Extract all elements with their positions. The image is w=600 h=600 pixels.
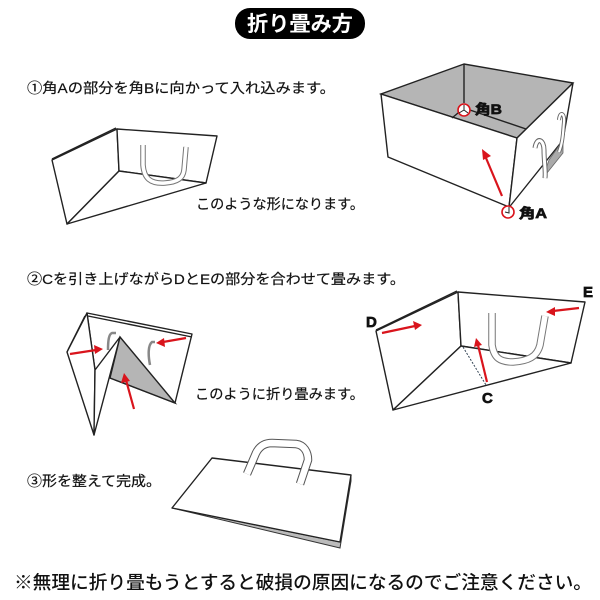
- marker: corner B: [458, 101, 502, 117]
- diagram: folding in: [67, 313, 192, 435]
- step 1 text: ①角Aの部分を角Bに向かって入れ込みます。: [27, 80, 335, 96]
- diagram: corner pushed in: [52, 128, 217, 224]
- arrows: [70, 338, 186, 409]
- arrows: [382, 307, 579, 382]
- marker: corner B: 角B: [475, 101, 502, 117]
- labels: C: [482, 390, 493, 407]
- labels: [366, 284, 593, 407]
- handles: [535, 114, 564, 178]
- labels: E: [583, 284, 593, 301]
- title: 折り畳み方: [247, 13, 353, 36]
- warning note: ※無理に折り畳もうとすると破損の原因になるのでご注意ください。: [14, 572, 592, 593]
- marker: corner A: 角A: [519, 205, 547, 221]
- labels: D: [366, 314, 377, 331]
- diagram: finished bag: [172, 443, 351, 548]
- step 3 text: ③形を整えて完成。: [27, 473, 161, 489]
- arrow: [482, 149, 502, 196]
- open box diagram: [381, 64, 573, 221]
- diagram: ready to fold: [366, 284, 593, 410]
- step 2 text: ②Cを引き上げながらDとEの部分を合わせて畳みます。: [27, 271, 405, 287]
- caption 2: このように折り畳みます。: [195, 386, 364, 402]
- caption 1: このような形になります。: [196, 196, 364, 212]
- title: [235, 8, 365, 39]
- marker: corner A: [502, 205, 547, 221]
